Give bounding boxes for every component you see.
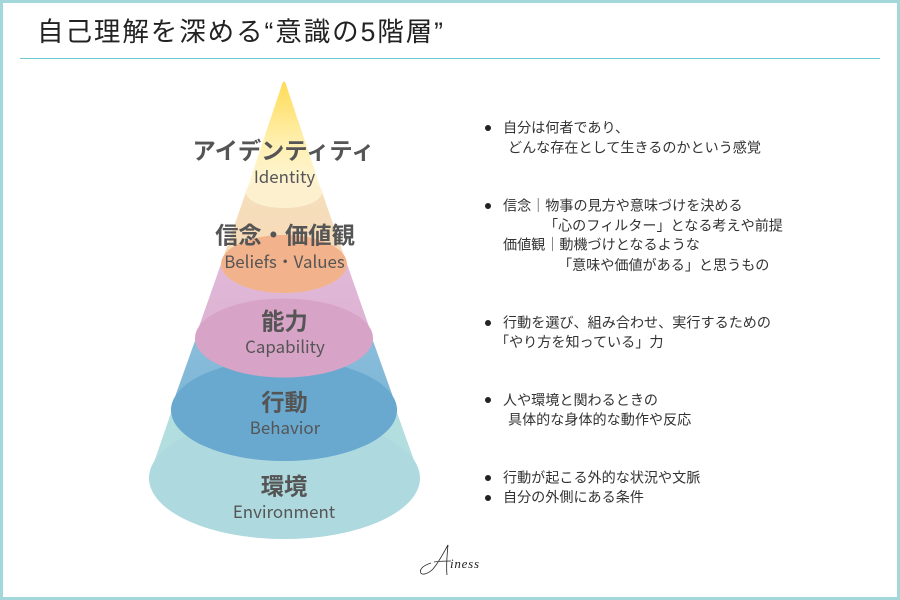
- description: beliefs and values: 価値観｜動機づけとなるような: [503, 234, 700, 254]
- layer: environment: [149, 410, 420, 539]
- label: environment: [233, 468, 336, 523]
- label: identity: Identity: [254, 163, 315, 188]
- logo: Ainess signature: [420, 545, 479, 575]
- logo: Ainess signature: iness: [450, 556, 479, 571]
- description: identity: 自分は何者であり、: [503, 118, 629, 138]
- label: identity: アイデンティティ: [192, 132, 374, 166]
- description: capability: 行動を選び、組み合わせ、実行するための: [503, 312, 771, 332]
- description: beliefs and values: 「意味や価値がある」と思うもの: [558, 255, 769, 275]
- description: environment: [485, 468, 700, 507]
- label: capability: [245, 302, 325, 358]
- description: identity: どんな存在として生きるのかという感覚: [508, 138, 761, 158]
- label: behavior: 行動: [261, 384, 308, 418]
- layer: capability: [195, 264, 373, 378]
- label: behavior: [250, 384, 321, 439]
- description: behavior: 人や環境と関わるときの: [503, 390, 658, 410]
- pyramid diagram: [149, 82, 420, 539]
- description: identity: [485, 118, 761, 158]
- label: capability: 能力: [261, 302, 308, 336]
- description: beliefs and values: 「心のフィルター」となる考えや前提: [544, 216, 783, 236]
- label: environment: Environment: [233, 498, 336, 523]
- description: capability: 「やり方を知っている」力: [495, 332, 663, 352]
- label: beliefs and values: 信念・価値観: [215, 216, 355, 250]
- description: beliefs and values: [485, 196, 783, 275]
- title: 自己理解を深める“意識の5階層”: [37, 17, 443, 47]
- description: behavior: 具体的な身体的な動作や反応: [508, 410, 691, 430]
- layer: beliefs and values: [221, 192, 347, 293]
- label: identity: [192, 132, 374, 188]
- label: behavior: Behavior: [250, 414, 321, 439]
- description: environment: 自分の外側にある条件: [503, 487, 644, 507]
- layer: identity: [246, 82, 322, 208]
- description: behavior: [485, 390, 691, 430]
- description: environment: 行動が起こる外的な状況や文脈: [503, 468, 700, 488]
- layer: behavior: [171, 338, 397, 461]
- label: beliefs and values: Beliefs・Values: [224, 248, 345, 273]
- label: beliefs and values: [215, 216, 355, 273]
- description: beliefs and values: 信念｜物事の見方や意味づけを決める: [503, 196, 743, 216]
- label: capability: Capability: [245, 333, 325, 358]
- label: environment: 環境: [261, 468, 307, 502]
- description: capability: [485, 312, 771, 352]
- title underline: [20, 58, 880, 59]
